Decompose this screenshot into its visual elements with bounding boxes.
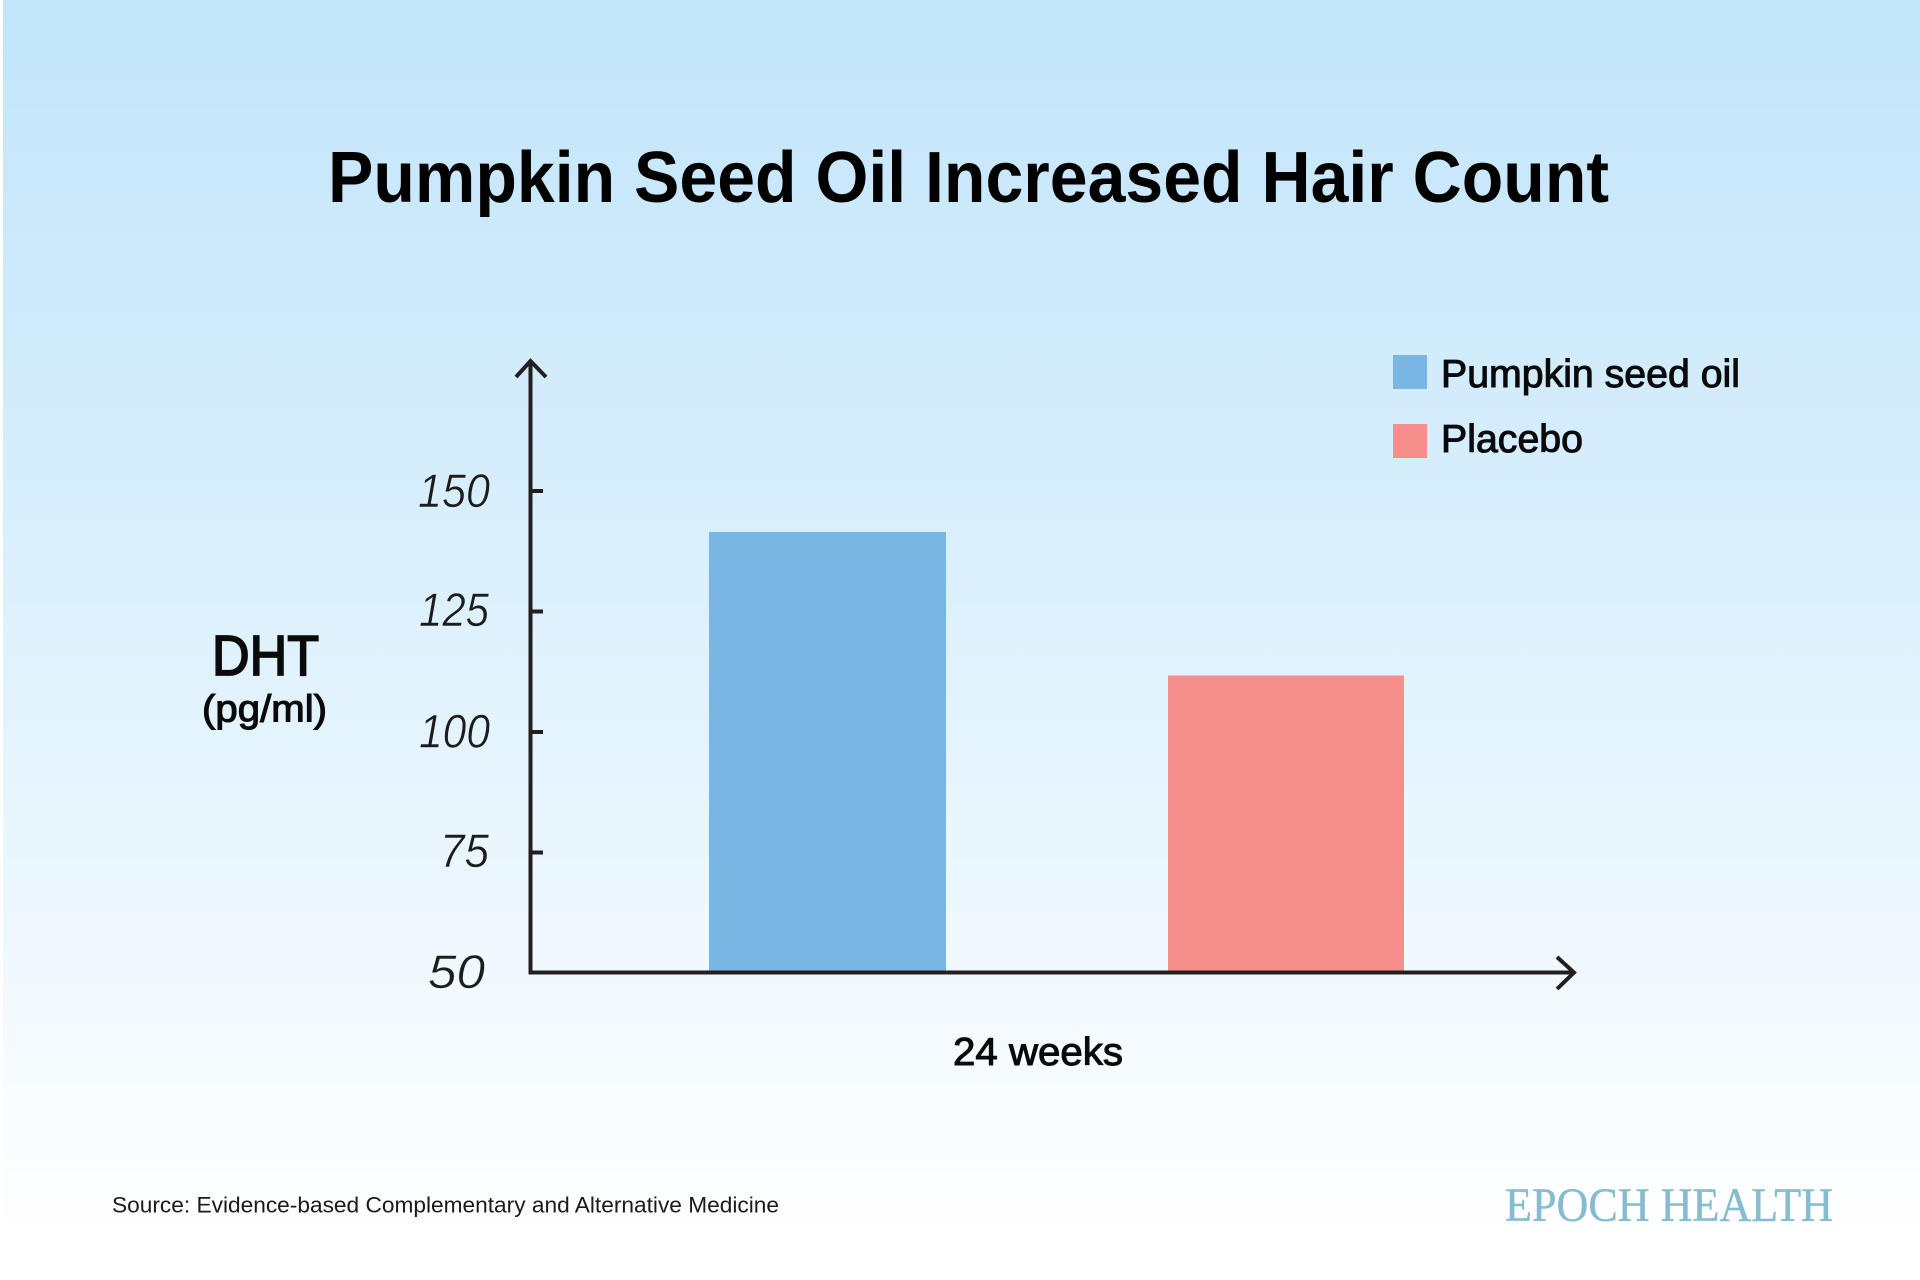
y-axis tick labels: 100	[419, 704, 490, 758]
y-axis tick labels: 125	[419, 583, 490, 636]
legend label: pumpkin seed oil: Pumpkin seed oil	[1441, 353, 1740, 396]
title: Pumpkin Seed Oil Increased Hair Count	[328, 138, 1609, 218]
x-axis label: 24 weeks	[953, 1031, 1123, 1074]
y-axis label: DHT	[212, 624, 319, 688]
legend label: placebo: Placebo	[1441, 418, 1583, 461]
y-axis tick labels: 75	[440, 824, 490, 877]
y-axis tick labels: 50	[428, 945, 485, 998]
chart axes	[516, 360, 1574, 989]
legend	[1393, 353, 1740, 461]
bar: pumpkin seed oil	[709, 532, 946, 972]
source note: Source: Evidence-based Complementary and Alternative Medicine	[112, 1192, 779, 1218]
brand logo text: EPOCH HEALTH	[1505, 1179, 1833, 1232]
y-axis label: (pg/ml)	[202, 688, 327, 730]
bar: placebo	[1168, 676, 1404, 972]
y-axis tick labels	[418, 464, 490, 998]
legend swatch: pumpkin seed oil	[1393, 355, 1427, 389]
y-axis tick labels: 150	[418, 464, 490, 517]
legend swatch: placebo	[1393, 424, 1427, 458]
y-axis label	[202, 624, 327, 730]
